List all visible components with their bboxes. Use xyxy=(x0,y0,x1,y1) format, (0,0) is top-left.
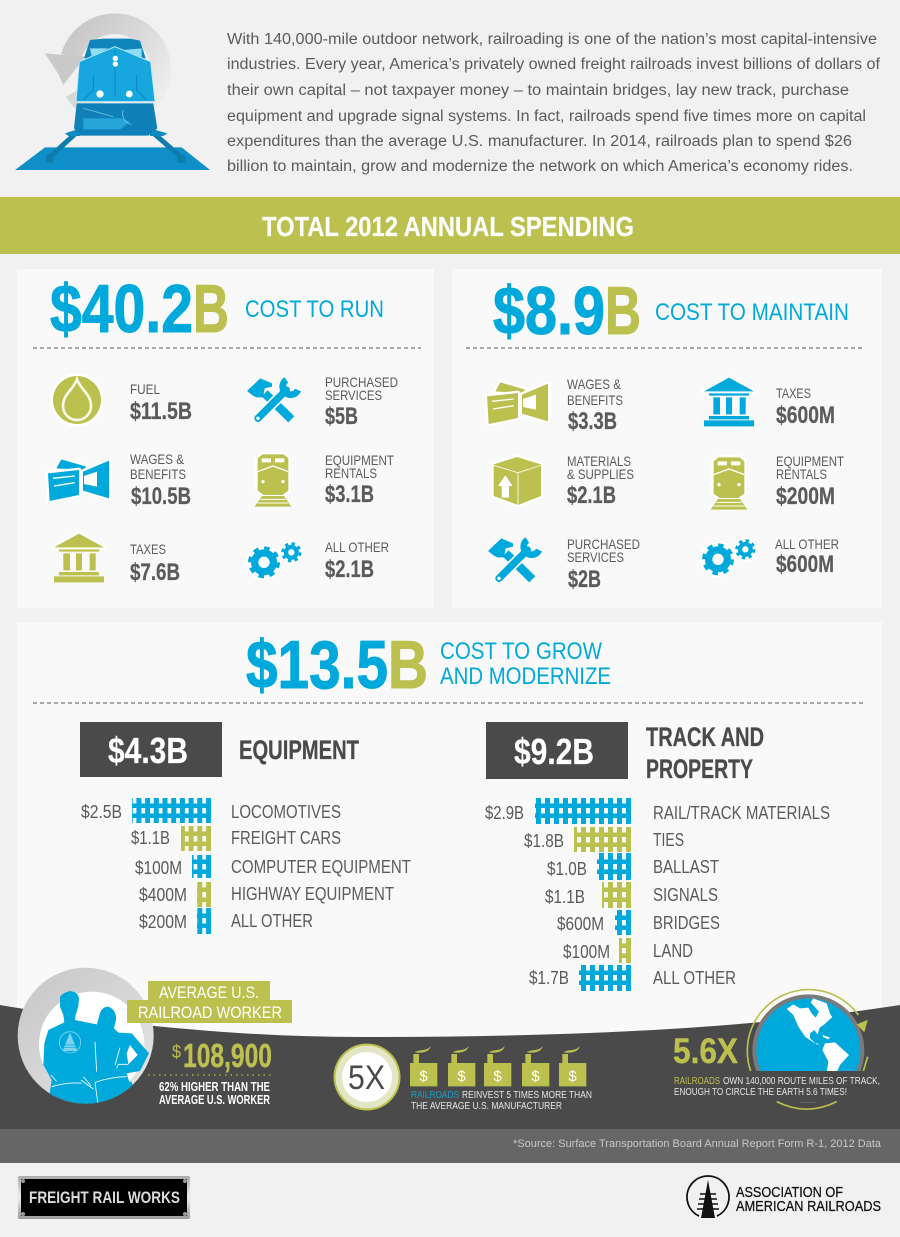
taxes spending xyxy=(776,385,835,429)
stat: $108,900 worker pay: 108,900 xyxy=(183,1037,272,1074)
bar chart: equipment xyxy=(81,798,411,934)
icon: tools xyxy=(247,378,298,420)
logo: freight rail works xyxy=(18,1176,190,1219)
caption: reinvest 5 times more: THE AVERAGE U.S. MANUFACTURER xyxy=(411,1101,562,1112)
dark footer band xyxy=(0,1005,900,1130)
stat: 5X badge: 5X xyxy=(348,1059,385,1097)
equipment rentals spending: EQUIPMENT xyxy=(776,453,844,469)
source bar: *Source: Surface Transportation Board Annual Report Form R-1, 2012 Data xyxy=(513,1138,882,1150)
heading: $13.5B cost to grow and modernize xyxy=(246,627,611,703)
purchased services spending xyxy=(567,536,640,593)
icon: box xyxy=(494,457,541,505)
bar chart: equipment: $100M xyxy=(135,858,182,878)
bar chart: equipment: HIGHWAY EQUIPMENT xyxy=(231,884,394,904)
caption: reinvest 5 times more: REINVEST 5 TIMES MORE THAN xyxy=(462,1090,592,1101)
source bar xyxy=(0,1129,900,1163)
panel: cost to maintain xyxy=(452,269,882,608)
all other spending: $600M xyxy=(776,551,834,578)
heading: $40.2B cost to run xyxy=(50,271,384,347)
equipment total: $4.3B xyxy=(108,730,188,771)
icon: temple xyxy=(54,534,104,582)
all other spending: ALL OTHER xyxy=(775,536,839,552)
equipment rentals spending xyxy=(325,452,394,508)
bar chart: track and property: RAIL/TRACK MATERIALS xyxy=(653,803,830,823)
heading: $8.9B cost to maintain: $8.9 xyxy=(493,273,605,349)
icon: gears xyxy=(700,537,757,577)
icon: locomotive on tracks with circular arrow xyxy=(15,24,210,170)
materials and supplies spending xyxy=(567,453,634,509)
materials and supplies spending: $2.1B xyxy=(567,482,616,509)
wages and benefits spending: BENEFITS xyxy=(130,466,186,482)
caption: reinvest 5 times more xyxy=(411,1090,592,1112)
heading: $13.5B cost to grow and modernize: B xyxy=(388,627,428,703)
materials and supplies spending: MATERIALS xyxy=(567,453,631,469)
equipment rentals spending: $200M xyxy=(776,483,835,510)
icons: factories with dollar signs: $ xyxy=(531,1068,540,1085)
icons: factories with dollar signs: $ xyxy=(568,1068,577,1085)
bar chart: track and property: SIGNALS xyxy=(653,885,718,905)
stat: $108,900 worker pay xyxy=(148,1037,272,1107)
heading: $8.9B cost to maintain: COST TO MAINTAIN xyxy=(655,299,849,326)
track and property total: TRACK AND xyxy=(646,722,764,752)
purchased services spending: PURCHASED xyxy=(325,374,398,390)
track and property total: $9.2B xyxy=(514,731,594,772)
equipment total: EQUIPMENT xyxy=(239,735,359,765)
heading: $8.9B cost to maintain: B xyxy=(605,273,641,349)
heading: $40.2B cost to run: COST TO RUN xyxy=(245,296,384,323)
wages and benefits spending: WAGES & xyxy=(130,451,185,467)
equipment total xyxy=(80,722,359,777)
bar chart: track and property: $2.9B xyxy=(485,803,524,823)
bar chart: track and property: LAND xyxy=(653,941,693,961)
taxes spending: $600M xyxy=(776,402,835,429)
purchased services spending xyxy=(325,374,398,430)
fuel spending xyxy=(130,381,192,425)
all other spending: ALL OTHER xyxy=(325,539,389,555)
wages and benefits spending xyxy=(130,451,191,510)
icons: factories with dollar signs xyxy=(410,1046,586,1086)
icon: temple xyxy=(704,378,754,426)
bar chart: track and property: $1.1B xyxy=(545,887,585,907)
logo: association of american railroads: ASSOCIATION OF xyxy=(736,1185,843,1201)
intro text block: expenditures than the average U.S. manufacturer. In 2014, railroads plan to spend $26 xyxy=(227,133,852,150)
taxes spending: TAXES xyxy=(776,385,811,401)
heading: $40.2B cost to run: B xyxy=(193,271,229,347)
icon: train xyxy=(711,457,747,510)
purchased services spending: SERVICES xyxy=(325,387,382,403)
equipment rentals spending xyxy=(776,453,844,510)
bar chart: track and property: $1.7B xyxy=(529,968,569,988)
banner: total 2012 annual spending xyxy=(0,197,900,254)
label: average U.S. railroad worker: AVERAGE U.S. xyxy=(159,983,259,1002)
icon: globe with orbit arrow xyxy=(747,990,868,1109)
heading: $13.5B cost to grow and modernize: COST TO GROW xyxy=(440,638,602,665)
bar chart: track and property: $600M xyxy=(557,914,604,934)
wages and benefits spending: $10.5B xyxy=(131,483,191,510)
track and property total: PROPERTY xyxy=(646,754,753,784)
intro text block: With 140,000-mile outdoor network, railroading is one of the nation’s most capital-intensive xyxy=(227,31,877,48)
bar chart: track and property: TIES xyxy=(653,830,684,850)
caption: reinvest 5 times more: RAILROADS xyxy=(411,1090,459,1101)
logo: association of american railroads xyxy=(687,1176,881,1218)
icon: wallet xyxy=(48,459,109,501)
bar chart: equipment: COMPUTER EQUIPMENT xyxy=(231,857,411,877)
icons: factories with dollar signs: $ xyxy=(457,1068,466,1085)
heading: $8.9B cost to maintain xyxy=(493,273,849,349)
materials and supplies spending: & SUPPLIES xyxy=(567,466,634,482)
stat: 5.6X: RAILROADS xyxy=(674,1076,720,1087)
fuel spending: $11.5B xyxy=(130,398,192,425)
icons: factories with dollar signs: $ xyxy=(419,1068,428,1085)
wages and benefits spending: BENEFITS xyxy=(567,392,623,408)
taxes spending: $7.6B xyxy=(130,559,180,586)
logo: association of american railroads: AMERICAN RAILROADS xyxy=(736,1199,881,1215)
bar chart: equipment: $400M xyxy=(139,885,187,905)
purchased services spending: $2B xyxy=(568,566,601,593)
heading: $13.5B cost to grow and modernize: AND MODERNIZE xyxy=(440,663,611,690)
icon: gears xyxy=(246,540,303,580)
stat: $108,900 worker pay: AVERAGE U.S. WORKER xyxy=(159,1093,270,1107)
icon: fuel drop xyxy=(53,376,101,424)
equipment rentals spending: $3.1B xyxy=(325,481,374,508)
panel: cost to grow and modernize xyxy=(17,622,882,1040)
icon: railroad workers in circle xyxy=(18,968,154,1108)
banner: total 2012 annual spending: TOTAL 2012 ANNUAL SPENDING xyxy=(262,211,634,242)
icon: wallet xyxy=(487,382,548,424)
bar chart: track and property xyxy=(485,798,830,991)
intro text block: billion to maintain, grow and modernize the network on which America’s economy rides. xyxy=(227,158,853,175)
equipment rentals spending: RENTALS xyxy=(776,466,827,482)
all other spending xyxy=(325,539,389,583)
stat: $108,900 worker pay: 62% HIGHER THAN THE xyxy=(159,1080,270,1094)
bar chart: equipment: FREIGHT CARS xyxy=(231,828,341,848)
intro text block: equipment and upgrade signal systems. In fact, railroads spend five times more on capital xyxy=(227,108,866,125)
panel: cost to run xyxy=(17,269,434,608)
bar chart: track and property: BALLAST xyxy=(653,857,719,877)
label: average U.S. railroad worker xyxy=(127,981,292,1023)
bar chart: equipment: $200M xyxy=(139,912,187,932)
bar chart: track and property: ALL OTHER xyxy=(653,968,736,988)
wages and benefits spending xyxy=(567,376,623,435)
taxes spending xyxy=(130,541,180,586)
bar chart: equipment: $1.1B xyxy=(131,828,170,848)
stat: 5X badge xyxy=(334,1044,400,1110)
stat: 5.6X: ENOUGH TO CIRCLE THE EARTH 5.6 TIMES! xyxy=(674,1087,847,1098)
bar chart: equipment: $2.5B xyxy=(81,802,122,822)
stat: 5.6X: 5.6X xyxy=(673,1032,739,1071)
purchased services spending: $5B xyxy=(325,403,358,430)
purchased services spending: PURCHASED xyxy=(567,536,640,552)
equipment rentals spending: EQUIPMENT xyxy=(325,452,394,468)
equipment rentals spending: RENTALS xyxy=(325,465,377,481)
intro text block xyxy=(227,31,881,175)
wages and benefits spending: WAGES & xyxy=(567,376,622,392)
bar chart: equipment: ALL OTHER xyxy=(231,911,313,931)
bar chart: track and property: $100M xyxy=(563,942,610,962)
all other spending: $2.1B xyxy=(325,556,374,583)
stat: $108,900 worker pay: $ xyxy=(172,1042,181,1062)
logo: freight rail works: FREIGHT RAIL WORKS xyxy=(29,1188,180,1207)
bar chart: equipment: LOCOMOTIVES xyxy=(231,802,341,822)
bar chart: track and property: $1.8B xyxy=(524,831,564,851)
icon: tools xyxy=(488,538,539,580)
heading: $40.2B cost to run: $40.2 xyxy=(50,271,193,347)
purchased services spending: SERVICES xyxy=(567,549,624,565)
wages and benefits spending: $3.3B xyxy=(568,408,617,435)
intro text block: their own capital – not taxpayer money – to maintain bridges, lay new track, purchase xyxy=(227,82,849,99)
heading: $13.5B cost to grow and modernize: $13.5 xyxy=(246,627,388,703)
all other spending xyxy=(775,536,839,578)
icon: train xyxy=(255,454,291,507)
track and property total xyxy=(486,722,764,784)
icons: factories with dollar signs: $ xyxy=(493,1068,502,1085)
fuel spending: FUEL xyxy=(130,381,160,397)
label: average U.S. railroad worker: RAILROAD WORKER xyxy=(138,1003,282,1022)
taxes spending: TAXES xyxy=(130,541,166,557)
bar chart: track and property: BRIDGES xyxy=(653,913,720,933)
bar chart: track and property: $1.0B xyxy=(547,859,587,879)
intro text block: industries. Every year, America’s privately owned freight railroads invest billions of dollars of xyxy=(227,56,881,73)
stat: 5.6X xyxy=(673,1032,880,1098)
